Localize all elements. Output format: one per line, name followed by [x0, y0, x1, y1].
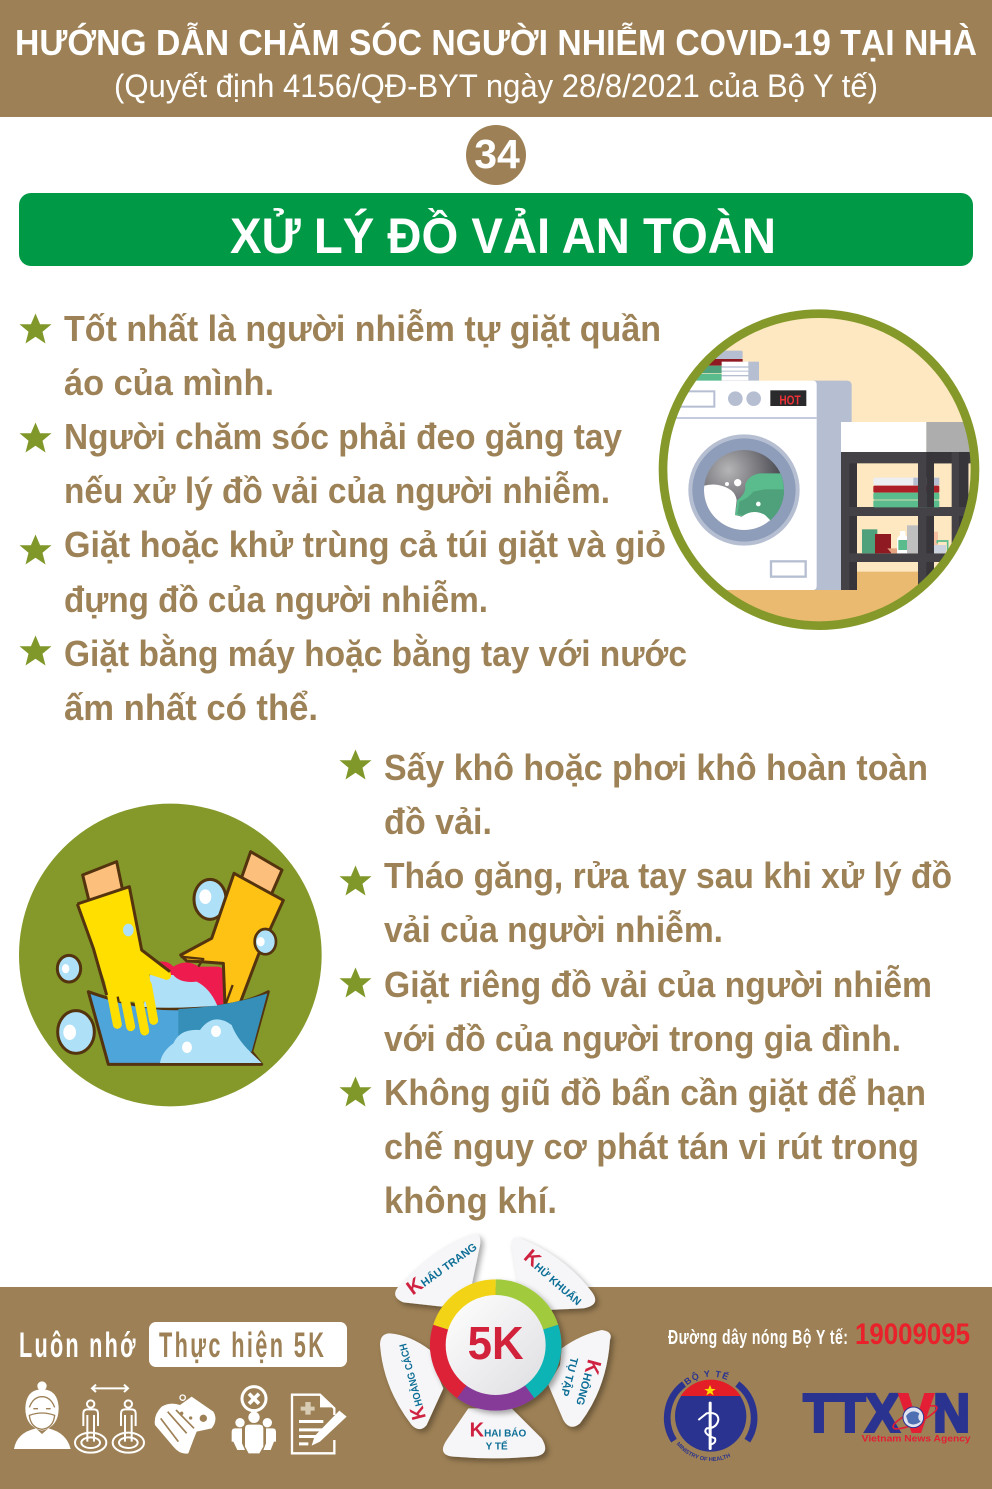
- text block: right advice list: với đồ của người trong gia đình.: [384, 1018, 901, 1059]
- text block: right advice list: [340, 747, 952, 1221]
- petal: Khai báo y tế: KHAI BÁO: [470, 1419, 526, 1441]
- subtitle: (Quyết định 4156/QĐ-BYT ngày 28/8/2021 của Bộ Y tế): [114, 68, 878, 104]
- petal: Khai báo y tế: [443, 1408, 545, 1458]
- section heading banner: [19, 193, 973, 266]
- centre 5K: [446, 1295, 546, 1395]
- hotline: 19009095: [855, 1318, 970, 1351]
- petal: Không tụ tập: [548, 1330, 611, 1427]
- text block: right advice list: Không giũ đồ bẩn cần giặt để hạn: [384, 1072, 926, 1113]
- icon: person wearing mask: [14, 1381, 71, 1449]
- icon: star 3: [20, 534, 52, 564]
- text block: left advice list: Giặt bằng máy hoặc bằng tay với nước: [64, 632, 687, 674]
- illustration: gloved hands washing in basin: [19, 804, 322, 1106]
- logo: Bộ Y tế: [664, 1370, 758, 1462]
- petal: Khử khuẩn: KHỬ KHUẨN: [519, 1246, 588, 1310]
- icon: washing hands: [155, 1395, 215, 1454]
- icon: star 7: [340, 968, 372, 998]
- text block: right advice list: không khí.: [384, 1180, 557, 1221]
- floor: [727, 590, 909, 622]
- left forearm skin: [83, 862, 125, 912]
- text block: right advice list: chế nguy cơ phát tán vi rút trong: [384, 1126, 919, 1167]
- logo: Bộ Y tế: MINISTRY OF HEALTH: [676, 1442, 730, 1462]
- reminder pill: Thực hiện 5K: Thực hiện 5K: [159, 1327, 324, 1365]
- basin: [88, 992, 268, 1064]
- washer body: HOT: [779, 394, 801, 408]
- centre 5K: 5K: [468, 1317, 524, 1369]
- petal: Khử khuẩn: [511, 1237, 595, 1310]
- soap bubbles: [57, 879, 226, 1053]
- text block: left advice list: Giặt hoặc khử trùng cả túi giặt và giỏ: [64, 524, 666, 565]
- number badge 34: 34: [474, 131, 520, 177]
- petal: Khai báo y tế: Y TẾ: [486, 1440, 508, 1453]
- hotline: Đường dây nóng Bộ Y tế:: [668, 1325, 848, 1349]
- 5K diagram: [380, 1234, 611, 1458]
- illustration: washing machine in circle: [650, 314, 990, 637]
- stacked laundry on washer: [696, 350, 759, 381]
- icon: star 8: [340, 1076, 372, 1106]
- colour ring: [438, 1287, 553, 1403]
- text block: left advice list: Tốt nhất là người nhiễm tự giặt quần: [64, 308, 661, 349]
- icon: no gathering: [232, 1387, 276, 1453]
- shelf unit: [841, 422, 974, 592]
- ring: [663, 314, 975, 626]
- text block: right advice list: đồ vải.: [384, 801, 492, 842]
- left glove: [77, 887, 171, 1031]
- logo: TTXVN: Vietnam News Agency: [862, 1433, 972, 1443]
- petal: Khoảng cách: KHOẢNG CÁCH: [390, 1342, 431, 1422]
- reminder heading: Luôn nhớ: Luôn nhớ: [19, 1327, 136, 1365]
- text block: left advice list: đựng đồ của người nhiễm.: [64, 579, 488, 620]
- text block: right advice list: Sấy khô hoặc phơi khô hoàn toàn: [384, 747, 928, 788]
- icon: star 6: [340, 866, 372, 896]
- text block: left advice list: [20, 308, 687, 728]
- petal: Không tụ tập: TỤ TẬP: [558, 1356, 581, 1398]
- icon: star 2: [20, 422, 52, 452]
- icon: star 1: [20, 314, 52, 344]
- suds: [160, 1019, 262, 1063]
- text block: left advice list: áo của mình.: [64, 362, 274, 403]
- footer band: [0, 1287, 992, 1489]
- folded towels: [873, 478, 939, 485]
- number badge 34: [466, 125, 526, 185]
- icon: keep distance: [75, 1385, 144, 1453]
- right forearm skin: [237, 852, 282, 905]
- text block: right advice list: vải của người nhiễm.: [384, 909, 723, 950]
- washer body: [650, 381, 852, 590]
- logo: TTXVN: TTXVN: [803, 1385, 970, 1444]
- icon: star 4: [20, 636, 52, 666]
- petal: Không tụ tập: KHÔNG: [571, 1357, 605, 1409]
- icon: star 5: [340, 750, 372, 780]
- petal: Khoảng cách: [380, 1333, 443, 1429]
- section heading banner: XỬ LÝ ĐỒ VẢI AN TOÀN: [230, 207, 776, 264]
- cloth: [150, 961, 223, 1008]
- logo: Bộ Y tế: BỘ Y TẾ: [684, 1370, 730, 1385]
- text block: right advice list: Tháo găng, rửa tay sau khi xử lý đồ: [384, 855, 952, 896]
- text block: left advice list: Người chăm sóc phải đeo găng tay: [64, 416, 622, 457]
- text block: left advice list: nếu xử lý đồ vải của người nhiễm.: [64, 470, 610, 511]
- right glove: [181, 873, 283, 1005]
- hotline: [668, 1318, 970, 1351]
- header band: [0, 0, 992, 117]
- text block: left advice list: ấm nhất có thể.: [64, 687, 318, 728]
- text block: right advice list: Giặt riêng đồ vải của người nhiễm: [384, 964, 932, 1005]
- bottles and boxes: [862, 529, 877, 553]
- icon: medical declaration form: [292, 1395, 347, 1453]
- petal: Khẩu trang: KHẨU TRANG: [403, 1235, 481, 1300]
- footer icons row: [14, 1381, 347, 1454]
